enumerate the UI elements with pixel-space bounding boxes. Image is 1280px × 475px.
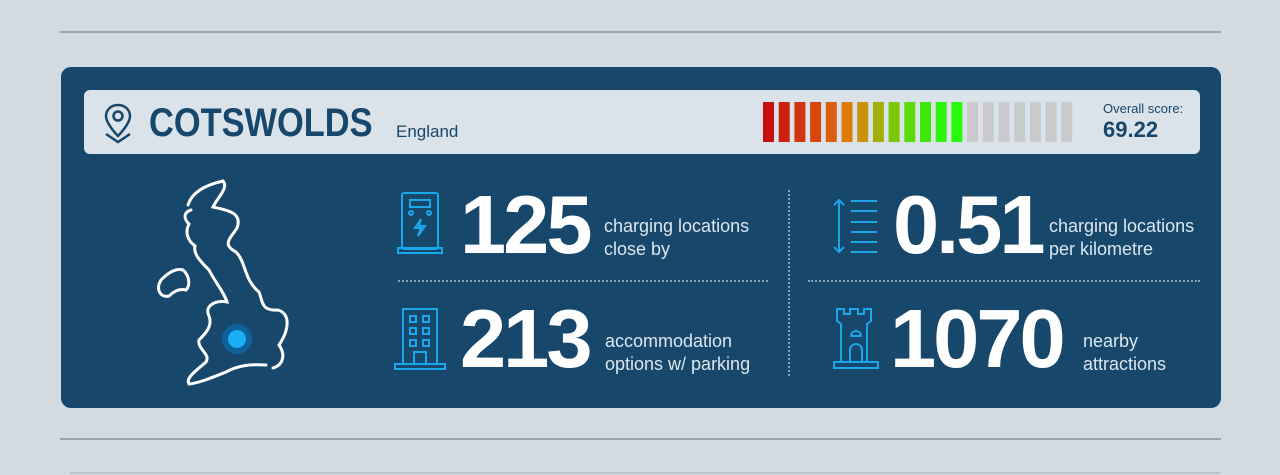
stat: attractions: nearby xyxy=(1083,331,1138,351)
stat: accommodation: 213 xyxy=(460,292,589,385)
icon: tower xyxy=(833,308,879,369)
stat: attractions xyxy=(833,292,1166,385)
overall score: 69.22 xyxy=(1103,117,1158,142)
stat: accommodation: accommodation xyxy=(605,331,732,351)
stat: per km xyxy=(833,178,1194,271)
overall score: Overall score: xyxy=(1103,101,1183,116)
icon: ruler arrows xyxy=(833,199,877,254)
icon: location pin xyxy=(104,104,132,144)
stat: attractions: attractions xyxy=(1083,354,1166,374)
stat: per km: charging locations xyxy=(1049,216,1194,236)
stat: charging locations: close by xyxy=(604,239,670,259)
icon: charger xyxy=(397,192,443,254)
stat: charging locations: 125 xyxy=(460,178,589,271)
header bar xyxy=(84,90,1200,154)
stat: per km: 0.51 xyxy=(893,178,1043,271)
stat: accommodation xyxy=(394,292,750,385)
title: COTSWOLDS xyxy=(149,101,373,145)
stat: accommodation: options w/ parking xyxy=(605,354,750,374)
dividers xyxy=(398,280,768,282)
map: UK xyxy=(157,179,289,386)
panel: card xyxy=(61,67,1221,408)
stat: attractions: 1070 xyxy=(890,292,1063,385)
score bars xyxy=(763,102,1072,142)
overall score xyxy=(1103,101,1183,142)
stat: charging locations xyxy=(397,178,749,271)
stat: per km: per kilometre xyxy=(1049,239,1153,259)
subtitle: England xyxy=(396,122,458,141)
icon: building xyxy=(394,308,446,370)
stat: charging locations: charging locations xyxy=(604,216,749,236)
